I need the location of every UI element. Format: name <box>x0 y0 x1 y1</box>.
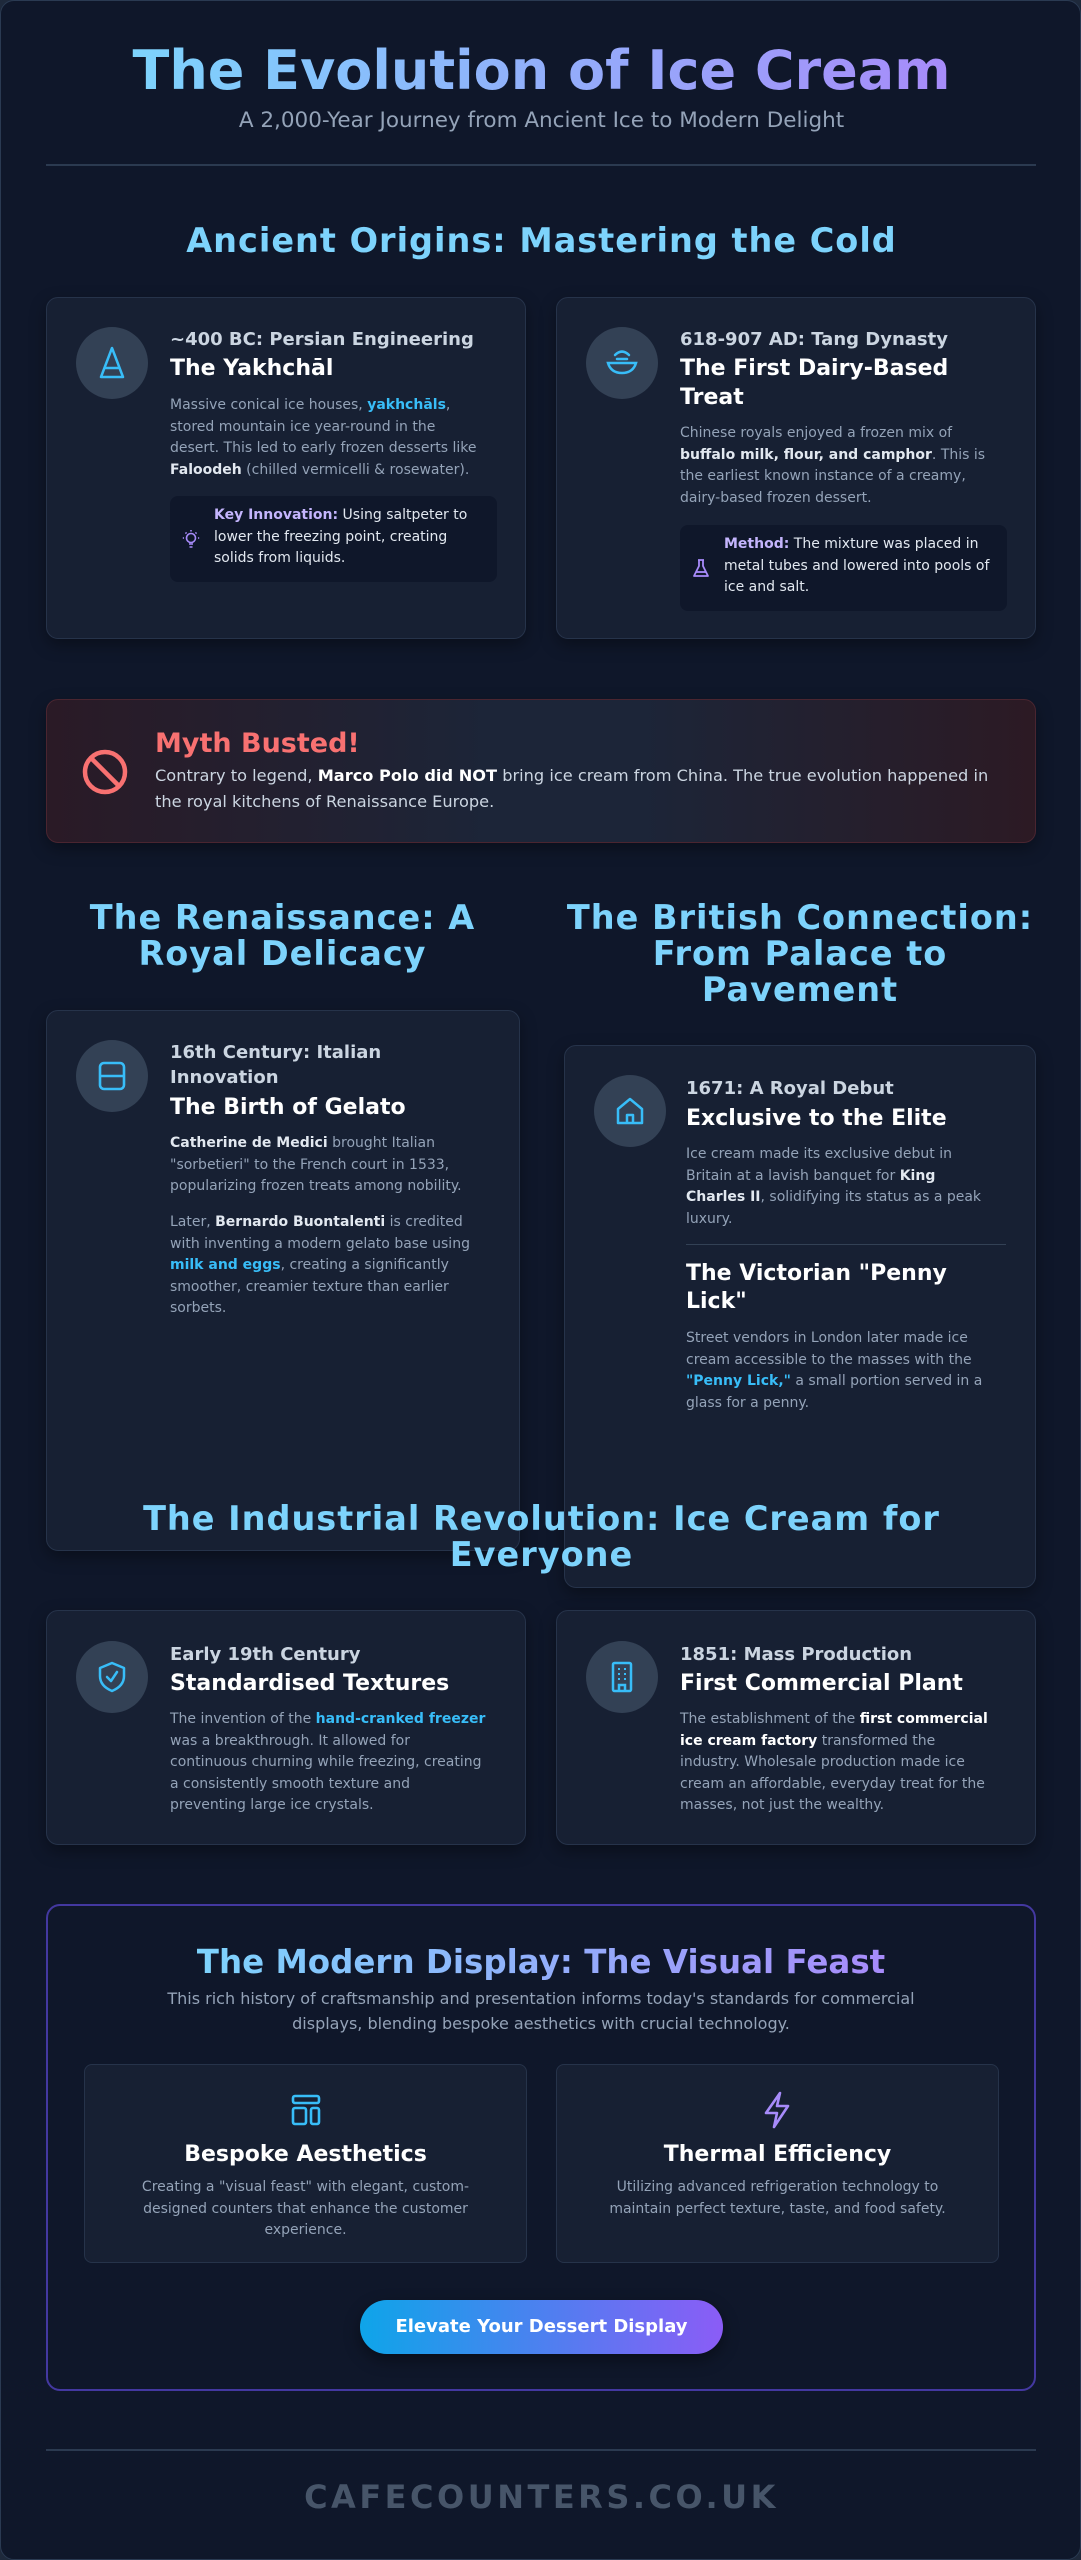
date <box>170 1042 381 1088</box>
heading: british: The British Connection: <box>567 898 1033 937</box>
body text 2 <box>686 1330 982 1411</box>
body text 2: Later, Bernardo Buontalenti is credited <box>170 1214 463 1230</box>
body text <box>686 1146 981 1227</box>
body text 2: with inventing a modern gelato base using <box>170 1236 470 1252</box>
heading: british: From Palace to <box>653 934 947 973</box>
icon: prohibited <box>82 750 128 794</box>
icon: layout <box>292 2094 320 2126</box>
icon: lightning <box>764 2092 790 2128</box>
date: 618-907 AD: Tang Dynasty <box>680 329 948 350</box>
body text: The establishment of the first commercial <box>680 1711 988 1727</box>
feature title: Bespoke Aesthetics <box>184 2142 427 2167</box>
body text 2: smoother, creamier texture than earlier <box>170 1279 449 1295</box>
panel: modern display <box>46 1904 1036 2391</box>
body text 2: glass for a penny. <box>686 1395 809 1411</box>
body text: popularizing frozen treats among nobility. <box>170 1178 462 1194</box>
body text: dairy-based frozen dessert. <box>680 490 872 506</box>
subtitle: penny lick <box>686 1261 947 1314</box>
card title: The Yakhchāl <box>170 356 333 381</box>
body text: Chinese royals enjoyed a frozen mix of <box>680 425 952 441</box>
date: 1851: Mass Production <box>680 1644 912 1665</box>
feature text <box>142 2179 469 2238</box>
myth text <box>155 766 988 811</box>
icon: bowl <box>586 327 658 399</box>
body text 2: cream accessible to the masses with the <box>686 1352 972 1368</box>
body text <box>170 1135 462 1194</box>
body text: continuous churning while freezing, creating <box>170 1754 482 1770</box>
icon: shield <box>76 1641 148 1713</box>
button: cta: Elevate Your Dessert Display <box>395 2316 688 2337</box>
subtitle: penny lick: The Victorian "Penny <box>686 1261 947 1286</box>
body text: Charles II, solidifying its status as a peak <box>686 1189 981 1205</box>
feature text: Utilizing advanced refrigeration technology to <box>617 2179 938 2195</box>
icon: building <box>586 1641 658 1713</box>
body text <box>170 397 476 478</box>
body text 2: sorbets. <box>170 1300 226 1316</box>
card title <box>680 356 948 410</box>
icon: flask <box>693 559 709 577</box>
button: cta <box>360 2300 723 2354</box>
body text: luxury. <box>686 1211 732 1227</box>
feature: thermal efficiency <box>556 2064 999 2263</box>
body text: Ice cream made its exclusive debut in <box>686 1146 952 1162</box>
heading: modern display: The Modern Display: The Visual Feast <box>197 1943 885 1981</box>
feature text: Creating a "visual feast" with elegant, custom- <box>142 2179 469 2195</box>
heading: british <box>567 898 1033 1009</box>
myth text: Contrary to legend, Marco Polo did NOT bring ice cream from China. The true evolution happened in <box>155 766 988 785</box>
subtitle: penny lick: Lick" <box>686 1289 747 1314</box>
card title: First Commercial Plant <box>680 1671 963 1696</box>
callout: key innovation: solids from liquids. <box>214 550 345 566</box>
date: Innovation <box>170 1067 279 1088</box>
card title: Standardised Textures <box>170 1671 449 1696</box>
callout: method <box>680 525 1007 611</box>
feature: bespoke aesthetics <box>84 2064 527 2263</box>
heading: ancient origins: Ancient Origins: Mastering the Cold <box>186 221 897 260</box>
body text: stored mountain ice year-round in the <box>170 419 435 435</box>
myth title: Myth Busted! <box>155 728 360 759</box>
body text <box>170 1711 486 1813</box>
card title: The Birth of Gelato <box>170 1095 406 1120</box>
callout: myth busted <box>46 699 1036 843</box>
title: The Evolution of Ice Cream <box>132 39 950 102</box>
body text: desert. This led to early frozen desserts like <box>170 440 476 456</box>
icon: house <box>594 1075 666 1147</box>
heading: renaissance: The Renaissance: A <box>90 898 475 937</box>
card title: Exclusive to the Elite <box>686 1106 947 1131</box>
body text: preventing large ice crystals. <box>170 1797 374 1813</box>
body text <box>680 1711 988 1813</box>
body text: masses, not just the wealthy. <box>680 1797 884 1813</box>
callout: key innovation: lower the freezing point, creating <box>214 529 447 545</box>
feature text: experience. <box>264 2222 347 2238</box>
intro text <box>167 1989 915 2033</box>
body text: the earliest known instance of a creamy, <box>680 468 966 484</box>
panel: commercial plant <box>556 1610 1036 1845</box>
body text 2: milk and eggs, creating a significantly <box>170 1257 449 1273</box>
feature text <box>609 2179 946 2217</box>
body text: industry. Wholesale production made ice <box>680 1754 965 1770</box>
heading: british: Pavement <box>702 970 898 1009</box>
body text: buffalo milk, flour, and camphor. This is <box>680 447 985 463</box>
icon: cone <box>76 327 148 399</box>
heading: renaissance <box>90 898 475 973</box>
body text: "sorbetieri" to the French court in 1533, <box>170 1157 449 1173</box>
callout: method: ice and salt. <box>724 579 809 595</box>
myth text: the royal kitchens of Renaissance Europe. <box>155 792 494 811</box>
callout: method: Method: The mixture was placed in <box>724 536 978 552</box>
body text: Faloodeh (chilled vermicelli & rosewater). <box>170 462 469 478</box>
heading: industrial revolution <box>143 1499 940 1574</box>
icon: bulb <box>182 530 200 548</box>
feature title: Thermal Efficiency <box>664 2142 891 2167</box>
panel: tang dynasty <box>556 297 1036 639</box>
panel: renaissance gelato <box>46 1010 520 1551</box>
callout: key innovation: Key Innovation: Using saltpeter to <box>214 507 467 523</box>
heading: renaissance: Royal Delicacy <box>138 934 427 973</box>
date: Early 19th Century <box>170 1644 360 1665</box>
feature text: designed counters that enhance the customer <box>143 2201 468 2217</box>
body text <box>680 425 985 506</box>
panel: standardised textures <box>46 1610 526 1845</box>
card title: Treat <box>680 385 744 410</box>
body text: The invention of the hand-cranked freezer <box>170 1711 485 1727</box>
heading: industrial revolution: The Industrial Revolution: Ice Cream for <box>143 1499 940 1538</box>
body text: cream an affordable, everyday treat for the <box>680 1776 985 1792</box>
body text: Britain at a lavish banquet for King <box>686 1168 935 1184</box>
card title: The First Dairy-Based <box>680 356 948 381</box>
callout: key innovation <box>170 496 497 582</box>
body text: Massive conical ice houses, yakhchāls, <box>170 397 450 413</box>
body text: was a breakthrough. It allowed for <box>170 1733 410 1749</box>
subtitle: A 2,000-Year Journey from Ancient Ice to Modern Delight <box>239 108 844 133</box>
date: ~400 BC: Persian Engineering <box>170 329 474 350</box>
body text 2: "Penny Lick," a small portion served in a <box>686 1373 982 1389</box>
icon: gelato layers <box>76 1040 148 1112</box>
intro text: This rich history of craftsmanship and presentation informs today's standards for commercial <box>167 1989 915 2008</box>
body text: a consistently smooth texture and <box>170 1776 410 1792</box>
body text 2: Street vendors in London later made ice <box>686 1330 968 1346</box>
heading: industrial revolution: Everyone <box>450 1535 633 1574</box>
date: 1671: A Royal Debut <box>686 1078 894 1099</box>
intro text: displays, blending bespoke aesthetics with crucial technology. <box>292 2014 790 2033</box>
callout: method: metal tubes and lowered into pools of <box>724 558 989 574</box>
panel: british <box>564 1045 1036 1588</box>
date: 16th Century: Italian <box>170 1042 381 1063</box>
panel: persian yakhchal <box>46 297 526 639</box>
body text: Catherine de Medici brought Italian <box>170 1135 435 1151</box>
footer brand: CAFECOUNTERS.CO.UK <box>304 2478 779 2516</box>
feature text: maintain perfect texture, taste, and food safety. <box>609 2201 946 2217</box>
body text 2 <box>170 1214 470 1316</box>
body text: ice cream factory transformed the <box>680 1733 935 1749</box>
